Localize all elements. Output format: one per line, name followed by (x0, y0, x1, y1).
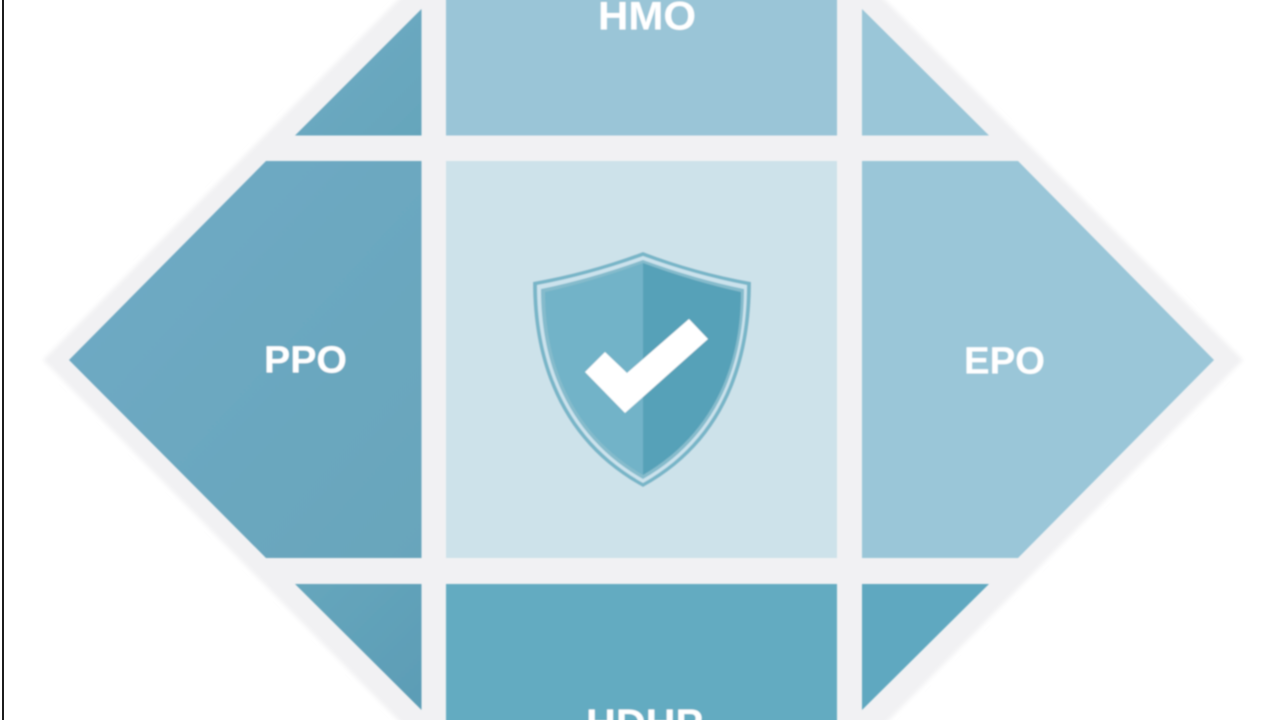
panel: EPO (862, 161, 1214, 558)
frame line (2, 0, 4, 720)
icon: shield with check mark (533, 252, 751, 487)
label: PPO: PPO (264, 340, 347, 382)
panel: HDHP (446, 584, 837, 720)
panel: PPO (69, 161, 422, 558)
panel: center (446, 161, 837, 558)
shield right half (643, 263, 741, 475)
icon: check mark (585, 319, 708, 413)
panel: HMO (446, 0, 837, 136)
panel: bottom-left triangle (295, 584, 422, 710)
label: EPO: EPO (964, 340, 1045, 382)
panel: top-left triangle (295, 9, 422, 136)
shield left half (545, 263, 643, 475)
panel: top-right triangle (862, 9, 989, 136)
panel: bottom-right triangle (862, 584, 989, 710)
